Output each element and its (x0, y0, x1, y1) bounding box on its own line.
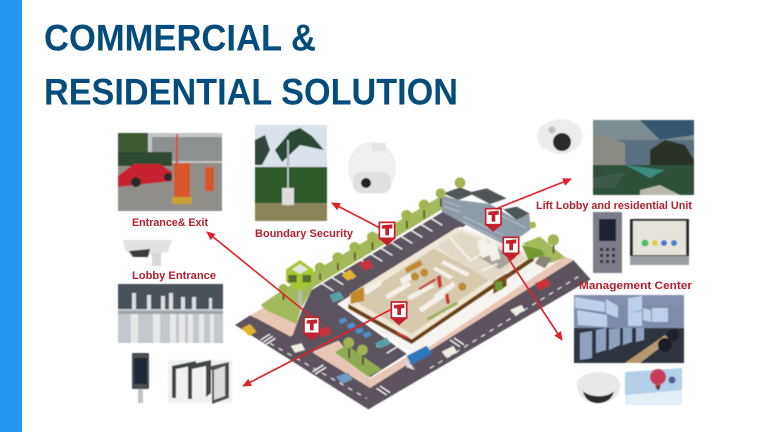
store rooms (436, 232, 528, 282)
photo: boundary security (255, 125, 327, 221)
store walls top (348, 228, 534, 342)
road markings (270, 277, 578, 398)
photo: control room (574, 295, 684, 363)
map pins (303, 209, 519, 341)
store brown front wall (348, 255, 534, 344)
title: COMMERCIAL & (44, 18, 316, 58)
arrow: to lift lobby (498, 179, 571, 208)
disabled bays (338, 317, 372, 338)
arrow: to management center (508, 258, 562, 340)
icon: PTZ dome camera (348, 142, 396, 194)
label: management center: Management Center (579, 280, 693, 292)
icon: mini dome camera (537, 119, 582, 154)
left sidewalk (251, 306, 302, 337)
title (44, 18, 458, 112)
photo: entrance and exit (118, 133, 222, 211)
arrow: to boundary security (332, 203, 380, 228)
arrow: to entrance and exit (207, 232, 313, 318)
accent bar (0, 0, 22, 432)
road L-shape (235, 260, 591, 409)
lower garden (335, 345, 382, 377)
green strip (261, 197, 451, 324)
vehicles (242, 259, 551, 384)
label: lift lobby and residential unit: Lift Lobby and residential Unit (536, 200, 692, 212)
arrow: to lobby entrance (243, 309, 392, 386)
photo: video wall (625, 368, 682, 405)
store floor (354, 248, 490, 334)
delivery truck lot (522, 245, 545, 260)
label: lobby entrance: Lobby Entrance (132, 270, 216, 282)
icon: turret dome camera (577, 372, 620, 403)
label: boundary security: Boundary Security (255, 228, 354, 240)
parking lines (322, 218, 442, 353)
icon: swing turnstiles (168, 360, 232, 404)
trees (278, 177, 559, 365)
label: entrance and exit: Entrance& Exit (132, 217, 208, 229)
shelves (365, 237, 501, 313)
icon: door station (593, 212, 622, 273)
isometric building map (235, 177, 591, 409)
icon: face terminal (132, 353, 149, 403)
icon: bullet camera (123, 240, 172, 266)
car park (293, 212, 466, 377)
photo: residential towers (593, 120, 694, 195)
pink lower block and front sidewalk (313, 256, 574, 388)
office building (442, 187, 531, 243)
green signage cube (286, 260, 313, 308)
white plinth (337, 227, 563, 353)
photo: lobby entrance gates (118, 284, 223, 343)
title: RESIDENTIAL SOLUTION (44, 72, 458, 112)
grass patch behind store (523, 237, 565, 263)
icon: indoor monitor (630, 219, 689, 265)
